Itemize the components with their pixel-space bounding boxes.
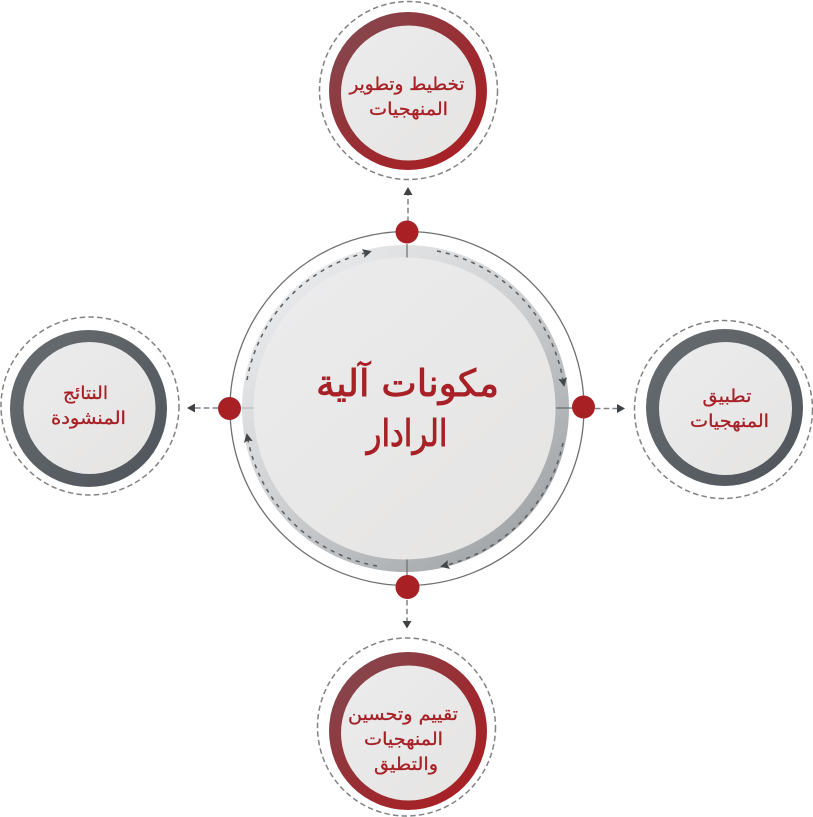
label: curriculum planning: تخطيط وتطوير (348, 74, 464, 95)
gray gradient ring (242, 245, 569, 572)
red node: left (218, 397, 241, 420)
connector: right (595, 404, 625, 413)
circular flow arrows (247, 251, 563, 566)
inner disc (254, 258, 556, 560)
label: curriculum planning: المنهجيات (369, 99, 448, 120)
central title: الرادار (365, 412, 448, 455)
panel: evaluating and improving (318, 638, 496, 816)
panel: curriculum application (634, 320, 812, 498)
outer thin ring (230, 232, 584, 586)
label: curriculum application: تطبيق (702, 386, 752, 407)
red node: right (572, 396, 595, 418)
label: evaluating and improving (348, 704, 458, 775)
panel: desired results (1, 317, 179, 495)
label: evaluating and improving: والتطيق (374, 754, 438, 775)
label: curriculum application: المنهجيات (690, 411, 769, 432)
ring tick marks (242, 244, 573, 578)
label: evaluating and improving: المنهجيات (364, 729, 443, 750)
central radar circle (230, 232, 584, 586)
panel: curriculum planning and development (320, 2, 498, 180)
red node: bottom (396, 575, 420, 599)
connector: bottom (402, 600, 412, 628)
label: desired results: المنشودة (51, 408, 126, 429)
connector: top (404, 187, 412, 222)
red node: top (396, 220, 418, 244)
label: evaluating and improving: تقييم وتحسين (348, 704, 458, 725)
label: desired results (51, 383, 126, 429)
central title (316, 361, 499, 455)
label: curriculum planning (348, 74, 464, 120)
label: curriculum application (690, 386, 769, 432)
central title: مكونات آلية (316, 361, 499, 405)
label: desired results: النتائج (63, 383, 108, 404)
connector: left (187, 404, 218, 412)
